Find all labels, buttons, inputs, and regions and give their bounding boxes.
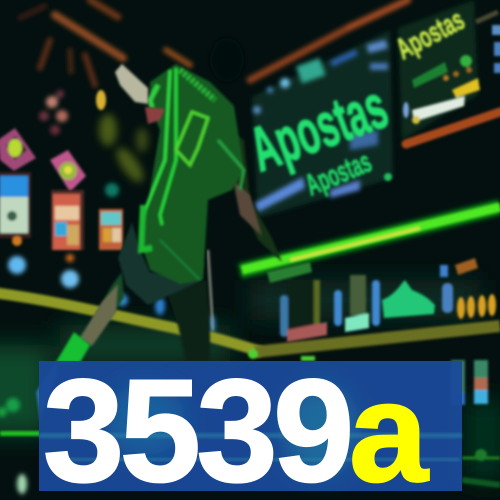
pink diamond sign 1 bbox=[0, 128, 36, 171]
right lower lights bbox=[451, 360, 500, 485]
pink diamond sign 2 bbox=[50, 150, 86, 192]
bottom left glow bbox=[0, 398, 27, 494]
left screen 1 bbox=[0, 172, 31, 246]
raised forearm bbox=[115, 64, 165, 124]
olive blur lights bbox=[99, 114, 148, 186]
blue panel bbox=[39, 361, 462, 491]
front leg bbox=[168, 250, 213, 362]
panel texture bbox=[39, 385, 462, 475]
left wall signs bbox=[0, 90, 215, 333]
green floor line bbox=[0, 431, 40, 436]
blue lamps bbox=[8, 254, 215, 333]
right screen bbox=[391, 0, 500, 144]
yellow lamp bbox=[96, 90, 106, 110]
screen panel bbox=[252, 30, 393, 218]
teal lamp bbox=[105, 183, 119, 197]
screen subtitle: Apostas bbox=[300, 144, 376, 202]
logo banner bbox=[39, 349, 462, 500]
back arm bbox=[226, 128, 282, 262]
far right lights bbox=[476, 12, 500, 73]
screen title: Apostas bbox=[241, 72, 396, 185]
shirt bbox=[140, 64, 244, 284]
left screen 2 bbox=[51, 190, 84, 250]
player bbox=[36, 38, 282, 420]
shorts bbox=[118, 222, 204, 305]
yellow-green floor rail left bbox=[0, 293, 262, 352]
left screen 3 bbox=[99, 209, 123, 250]
back leg bbox=[36, 272, 124, 420]
pink flower light bbox=[39, 90, 68, 135]
orange bar bbox=[406, 112, 500, 144]
right screen details bbox=[403, 55, 480, 124]
neon green bar bbox=[240, 207, 500, 271]
screen lights bbox=[253, 40, 388, 212]
head bbox=[210, 38, 244, 82]
ceiling beams bbox=[20, 0, 408, 85]
background glow bbox=[0, 280, 500, 480]
main screen bbox=[241, 30, 396, 218]
green status dot bbox=[384, 173, 392, 181]
dark panel bbox=[398, 0, 478, 140]
olive rail right bbox=[255, 326, 500, 352]
console panels bbox=[248, 258, 496, 361]
